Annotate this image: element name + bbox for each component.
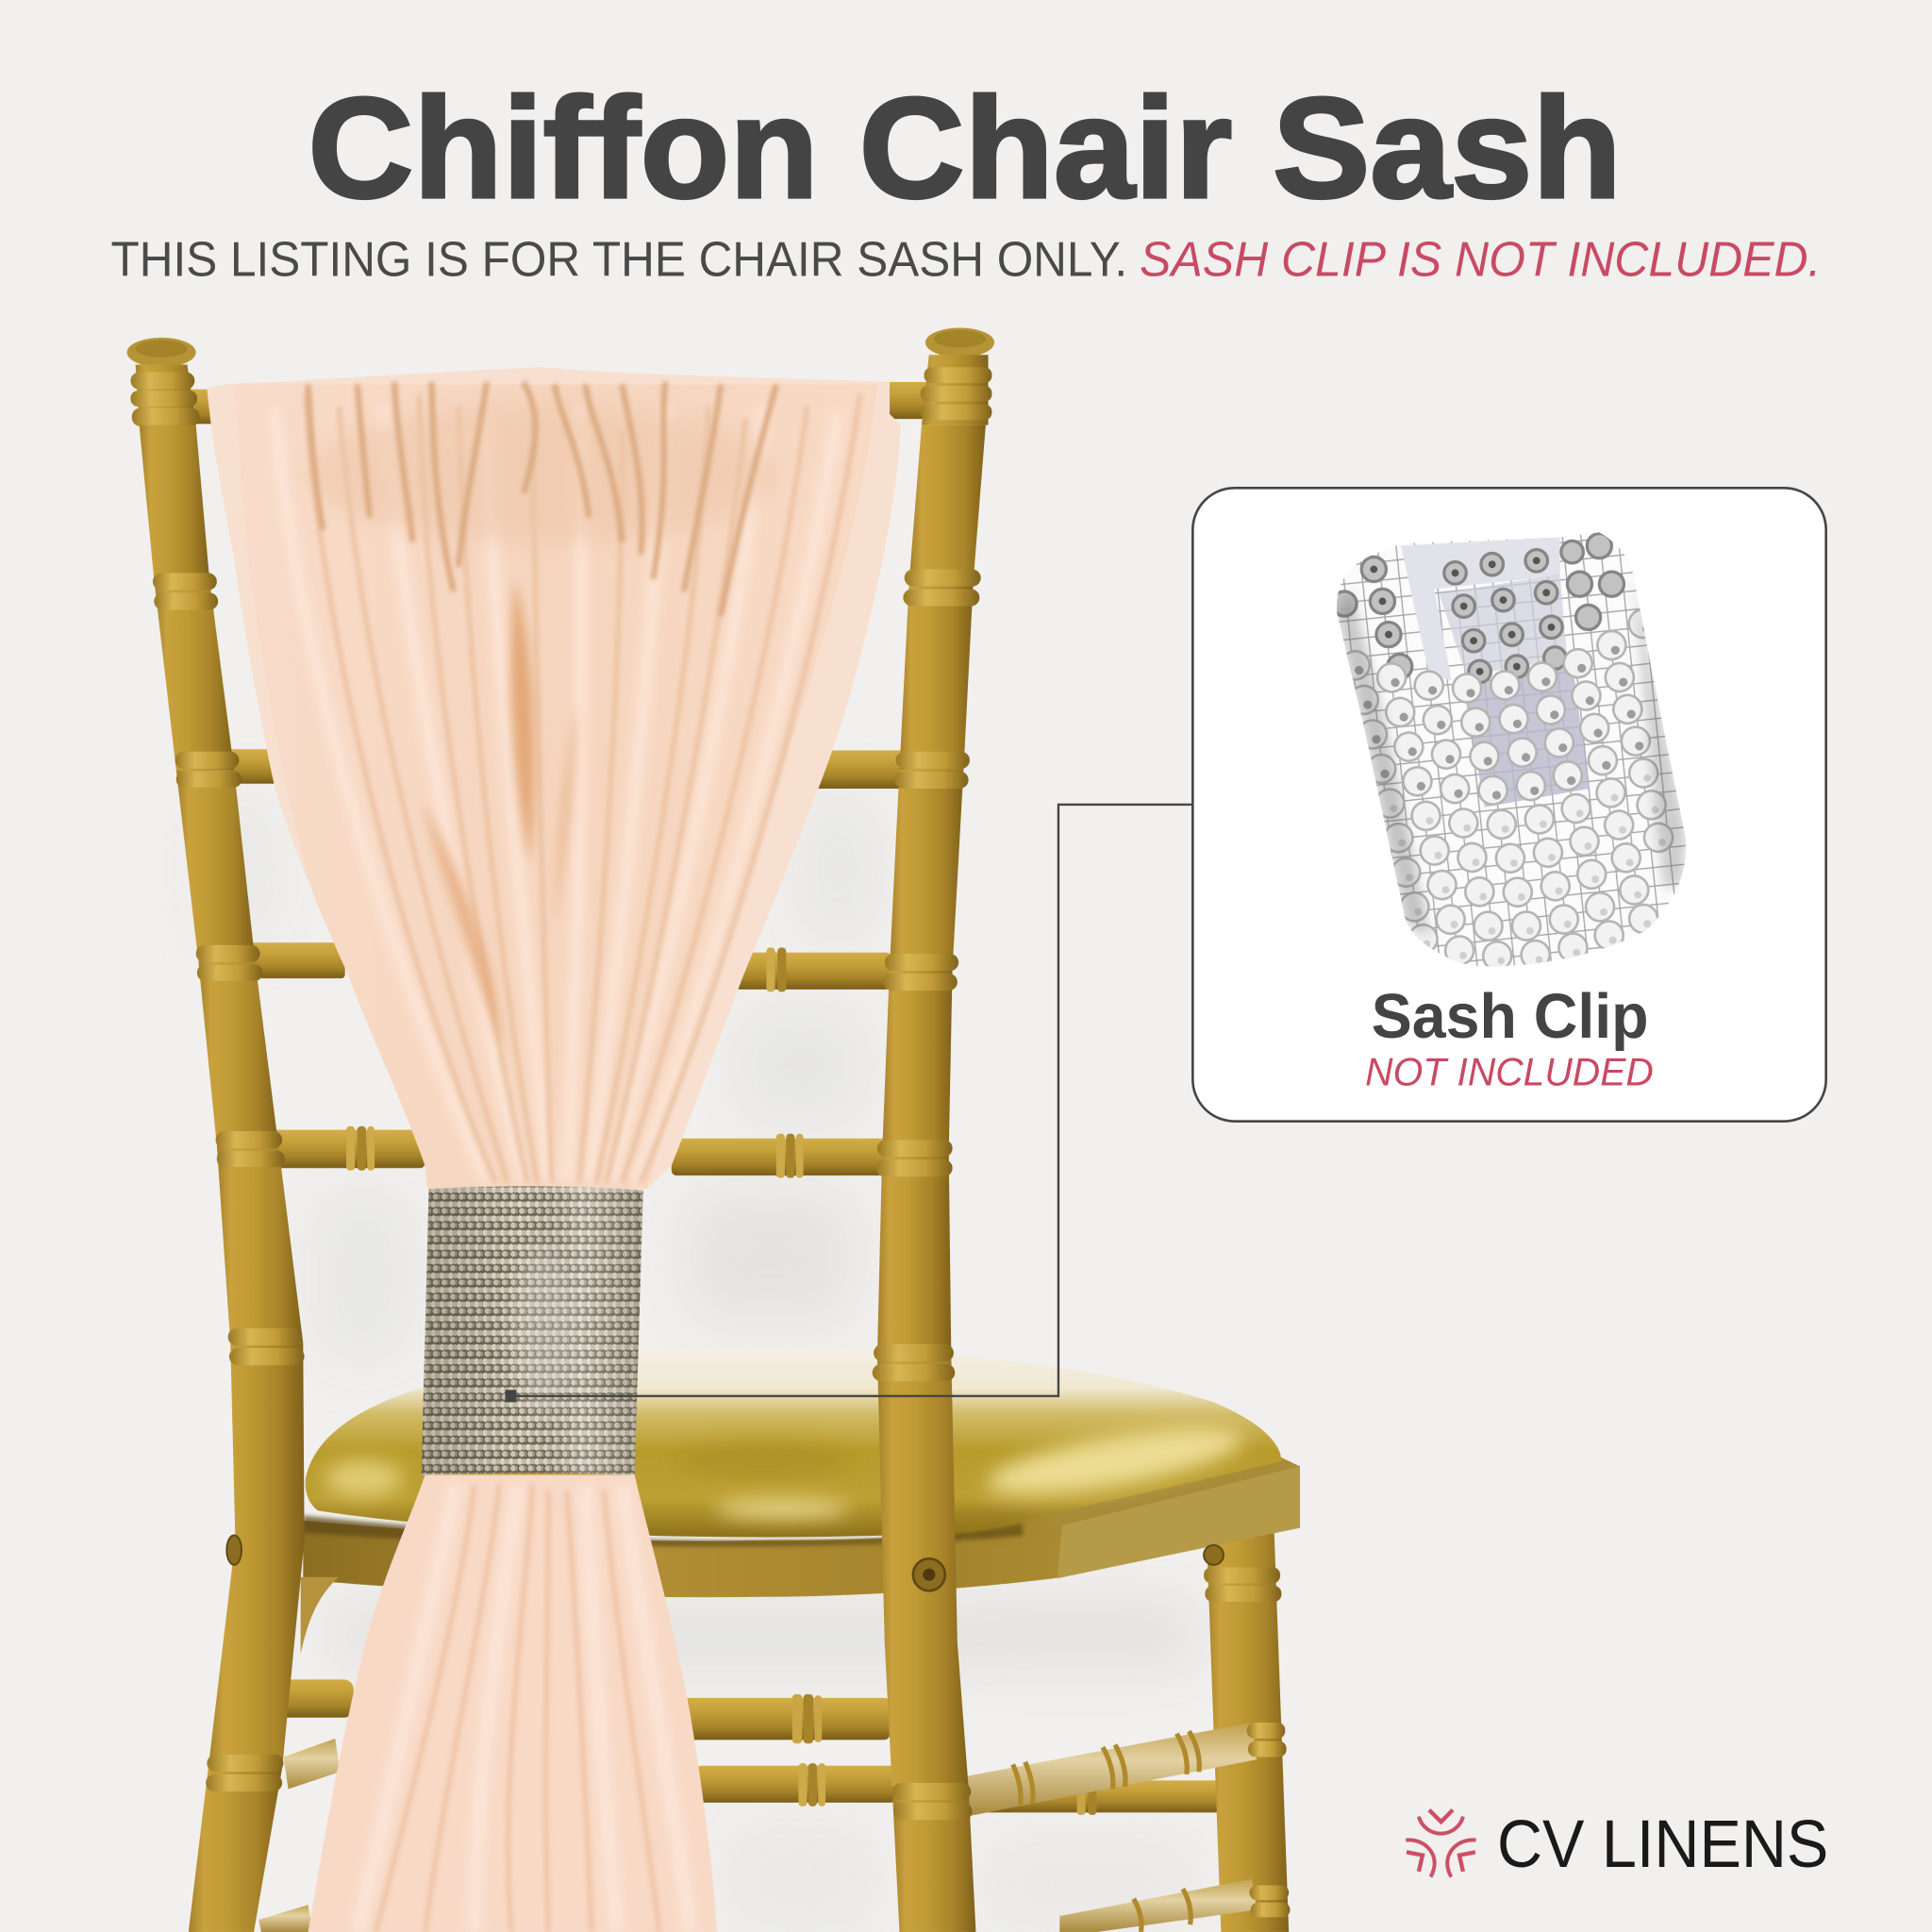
side stretchers [963, 1723, 1291, 1932]
rear studs [1332, 534, 1624, 683]
logo wordmark: CV LINENS [1497, 1807, 1828, 1882]
seat cushion [306, 1346, 1281, 1537]
sash fabric: lower tail [295, 1466, 727, 1932]
logo icon [1406, 1810, 1476, 1877]
soft shadows on backdrop [209, 801, 1195, 1932]
velcro backing [1401, 537, 1560, 680]
title: Chiffon Chair Sash [308, 69, 1622, 228]
upper back rails [185, 382, 930, 1178]
front right leg [1204, 1528, 1289, 1932]
front rhinestone rows [1356, 623, 1666, 957]
gathered top shading [308, 407, 776, 542]
subtitle: listing note: THIS LISTING IS FOR THE CHAIR SASH ONLY. [111, 233, 1127, 288]
seat frame [301, 1452, 1300, 1654]
lower back rails [258, 1679, 1217, 1932]
chair illustration [127, 327, 1300, 1932]
left post [127, 338, 305, 1932]
stud centres [1370, 557, 1555, 675]
gathered top folds [308, 382, 776, 616]
label: not included: NOT INCLUDED [1365, 1050, 1654, 1094]
label: sash clip: Sash Clip [1372, 982, 1649, 1052]
deep folds [422, 579, 577, 1047]
callout connector line [506, 805, 1192, 1402]
pleat highlights [274, 407, 838, 1183]
pleat shadows [306, 394, 860, 1183]
edge shading [1337, 591, 1429, 937]
rhinestone sash clip on chair [422, 1187, 643, 1474]
brand logo [1406, 1807, 1828, 1882]
image: rhinestone sash clip [1332, 532, 1686, 966]
callout card: sash clip [1192, 488, 1826, 1122]
subtitle: not included warning: SASH CLIP IS NOT INCLUDED. [1140, 233, 1821, 288]
right post [873, 327, 1224, 1932]
sash fabric: upper drape [197, 358, 912, 1195]
